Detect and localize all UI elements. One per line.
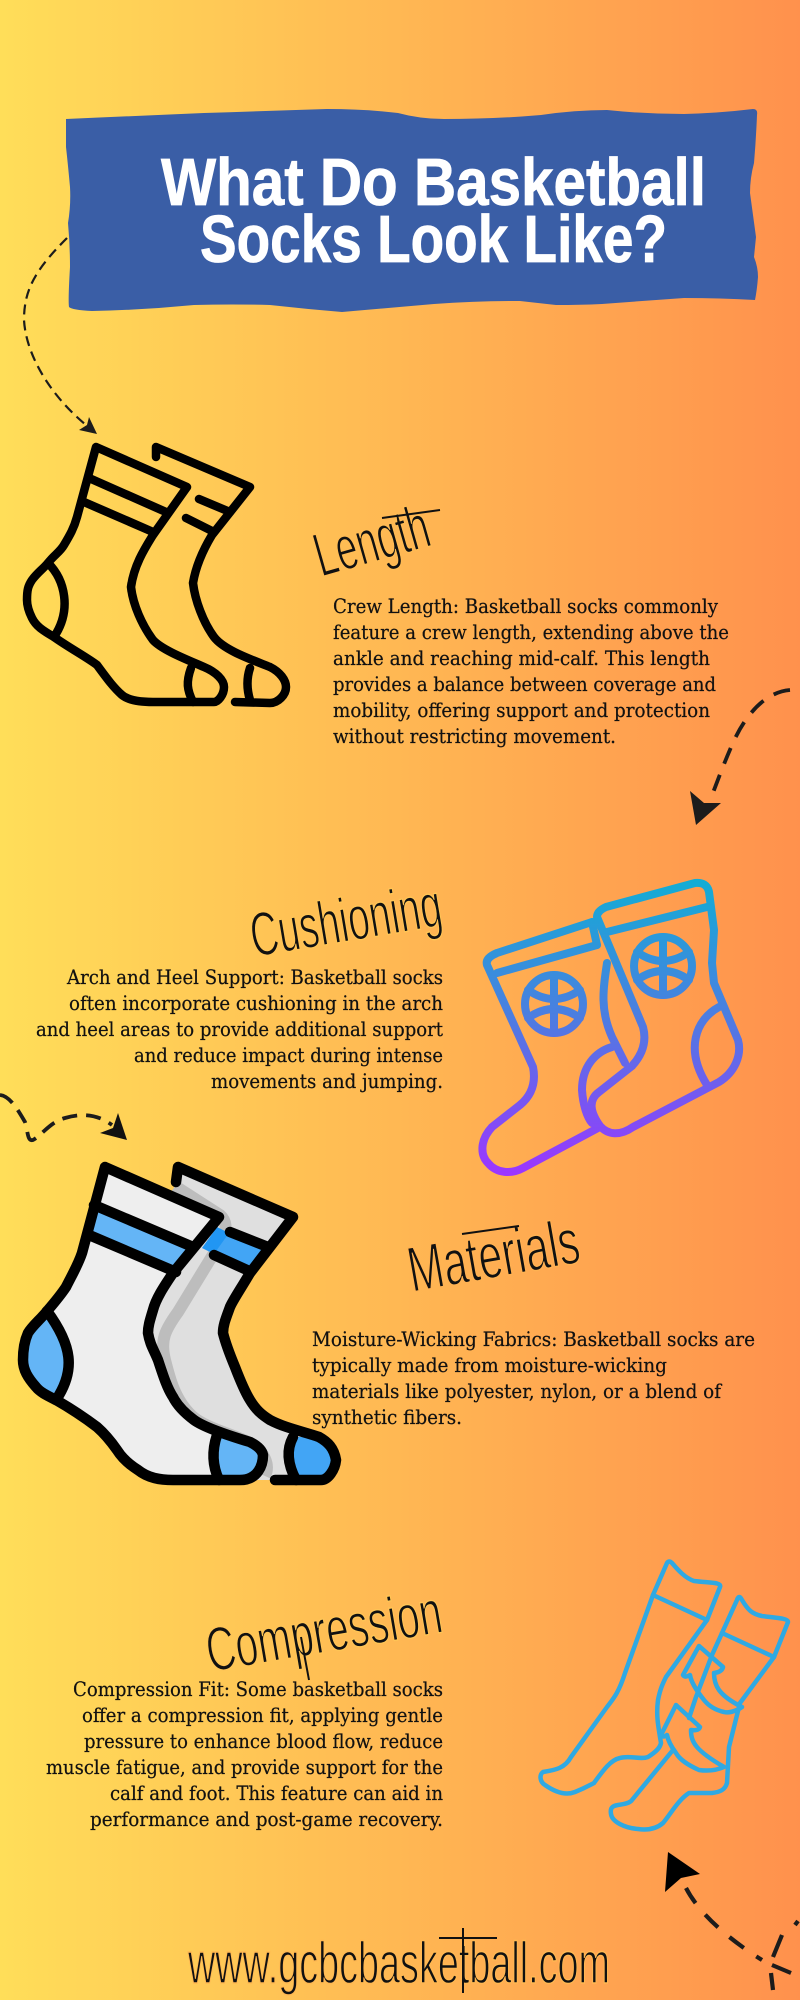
back sock shade xyxy=(163,1186,267,1476)
heading: Materials xyxy=(402,1205,585,1306)
heading: Cushioning: Cushioning xyxy=(245,871,447,971)
heading: Compression: Compression xyxy=(201,1578,447,1686)
icon: compression socks xyxy=(541,1562,788,1829)
heading: Length: Length xyxy=(306,492,437,590)
left sock xyxy=(482,922,598,1172)
lower arrow xyxy=(661,1705,724,1771)
text: Compression description: calf and foot. This feature can aid in xyxy=(110,1782,443,1805)
arrow: banner to first socks xyxy=(24,238,97,434)
front sock stripe xyxy=(89,1205,193,1272)
text: Compression description: offer a compression fit, applying gentle xyxy=(82,1704,443,1727)
front sock toe xyxy=(215,1435,263,1480)
website url xyxy=(187,1928,610,1996)
text: Length description xyxy=(333,595,729,748)
back sock outline xyxy=(176,1167,336,1480)
front sock fill xyxy=(23,1167,263,1480)
text: Length description: feature a crew length, extending above the xyxy=(333,621,729,644)
text: Cushioning description: Arch and Heel Support: Basketball socks xyxy=(66,966,443,989)
back sock toe xyxy=(291,1437,337,1480)
right leg xyxy=(611,1597,788,1829)
text: Compression description xyxy=(46,1678,443,1831)
title text: Socks Look Like? xyxy=(200,202,667,277)
text: Length description: Crew Length: Basketball socks commonly xyxy=(333,595,718,618)
back sock stripe xyxy=(212,1233,262,1268)
text: Materials description: materials like polyester, nylon, or a blend of xyxy=(312,1380,723,1403)
arrow: to white socks xyxy=(0,1095,127,1140)
text: Cushioning description: movements and jumping. xyxy=(211,1070,443,1093)
text: Materials description: synthetic fibers. xyxy=(312,1406,462,1429)
heading: Materials: Materials xyxy=(402,1205,585,1306)
front sock outline xyxy=(23,1167,263,1480)
title text xyxy=(161,145,706,277)
arrow: to compression socks xyxy=(665,1852,798,1990)
text: Cushioning description: often incorporate cushioning in the arch xyxy=(69,992,443,1015)
title text: What Do Basketball xyxy=(161,145,706,220)
text: Cushioning description: and reduce impact during intense xyxy=(134,1044,443,1067)
text: Length description: provides a balance between coverage and xyxy=(333,673,716,696)
text: Materials description: Moisture-Wicking Fabrics: Basketball socks are xyxy=(312,1328,755,1351)
text: Length description: without restricting movement. xyxy=(333,725,616,748)
front sock heel xyxy=(23,1311,69,1400)
back sock fill xyxy=(148,1167,337,1480)
text: Compression description: performance and post-game recovery. xyxy=(90,1808,443,1831)
text: Length description: ankle and reaching mid-calf. This length xyxy=(333,647,710,670)
icon: white and blue socks xyxy=(23,1167,337,1480)
text: Materials description xyxy=(312,1328,755,1429)
heading: Compression xyxy=(201,1578,447,1686)
text: Cushioning description xyxy=(36,966,443,1093)
title banner xyxy=(66,109,758,312)
icon: gradient basketball socks xyxy=(482,883,739,1172)
text: Materials description: typically made from moisture-wicking xyxy=(312,1354,667,1377)
left leg xyxy=(541,1562,720,1794)
text: Length description: mobility, offering support and protection xyxy=(333,699,710,722)
text: Compression description: pressure to enhance blood flow, reduce xyxy=(84,1730,443,1753)
back sock xyxy=(156,447,286,703)
arrow: to cushioning socks xyxy=(690,690,790,825)
text: Compression description: muscle fatigue, and provide support for the xyxy=(46,1756,443,1779)
banner shape xyxy=(66,109,758,312)
right sock xyxy=(592,883,739,1133)
front sock xyxy=(27,447,224,702)
text: Compression description: Compression Fit: Some basketball socks xyxy=(73,1678,443,1701)
text: Cushioning description: and heel areas to provide additional support xyxy=(36,1018,443,1041)
heading: Length xyxy=(306,492,440,590)
icon: black outline socks xyxy=(27,447,286,703)
upper arrow xyxy=(683,1646,742,1712)
